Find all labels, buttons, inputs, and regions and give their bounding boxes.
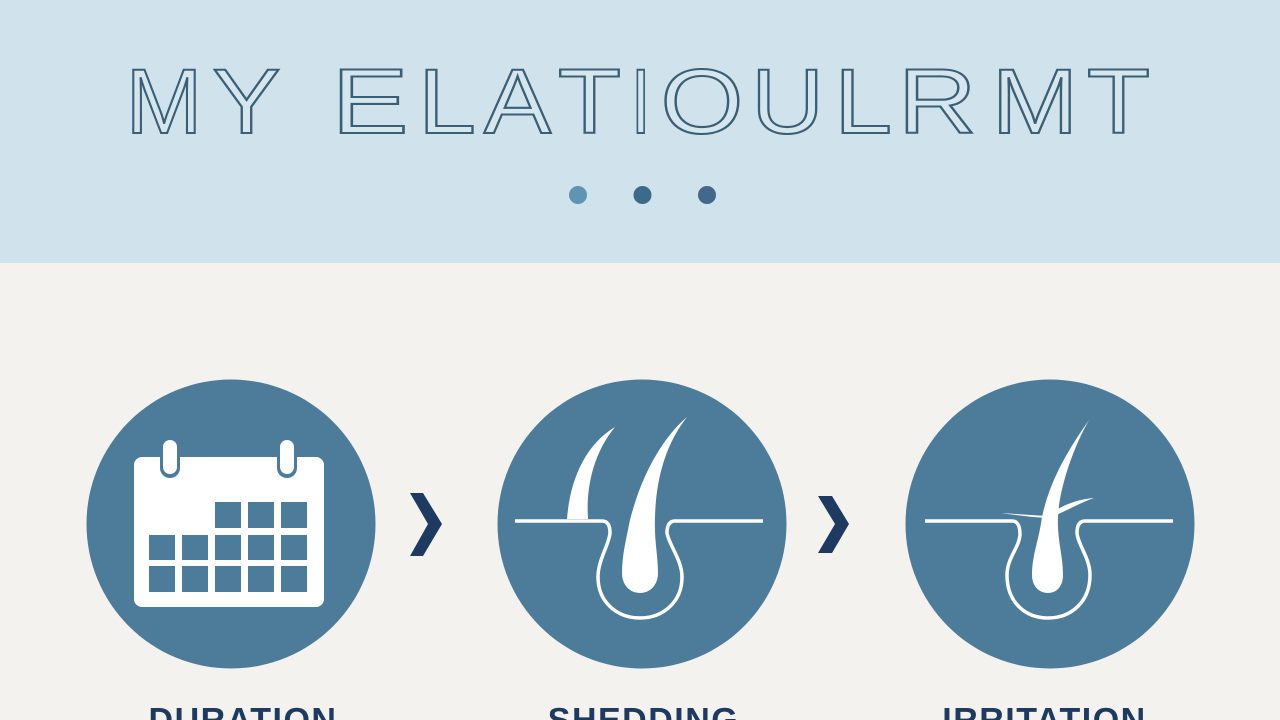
pagination dots [569,186,716,204]
title: I [631,49,651,153]
title: T [1087,49,1150,153]
icon: shedding hair follicle [498,380,786,668]
arrow: shedding to irritation [818,496,849,553]
title: R [898,51,977,153]
title [126,49,1150,153]
title: L [418,50,476,153]
icon: irritation hair follicle [906,380,1194,668]
title: M [992,50,1078,153]
title: O [660,51,743,153]
title: U [751,51,824,153]
title: T [558,49,621,153]
header band [0,0,1280,263]
arrow: duration to shedding [410,493,442,556]
title: Y [212,50,281,153]
title: E [332,51,408,153]
title: A [484,51,552,153]
icon: calendar [86,380,376,668]
title: M [126,51,202,153]
title: L [834,50,892,153]
